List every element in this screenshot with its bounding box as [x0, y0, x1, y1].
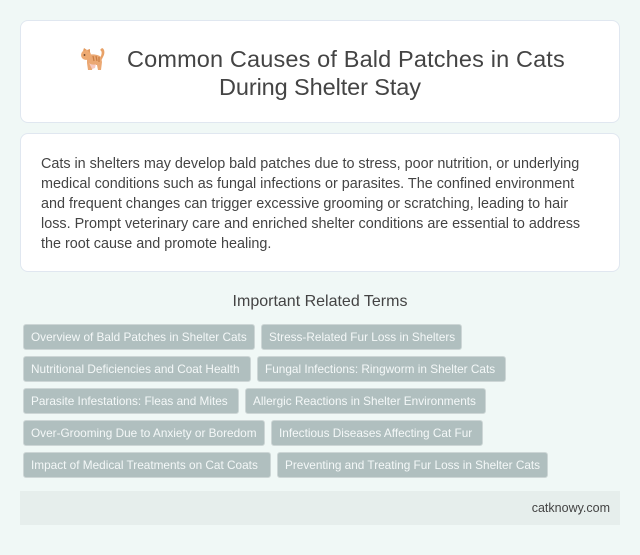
- tag list: Over-Grooming Due to Anxiety or Boredom: [31, 426, 257, 440]
- tag list: Stress-Related Fur Loss in Shelters: [269, 330, 455, 344]
- tag list: Fungal Infections: Ringworm in Shelter Cats: [265, 362, 495, 376]
- description text: medical conditions such as fungal infections or parasites. The confined environment: [41, 176, 574, 192]
- panel: description: [20, 133, 620, 272]
- description text: Cats in shelters may develop bald patches due to stress, poor nutrition, or underlying: [41, 156, 579, 172]
- tag list: Infectious Diseases Affecting Cat Fur: [279, 426, 472, 440]
- panel: title card: [20, 20, 620, 123]
- tag list: Nutritional Deficiencies and Coat Health: [31, 362, 240, 376]
- heading: related terms: Important Related Terms: [233, 293, 407, 310]
- tag list: Overview of Bald Patches in Shelter Cats: [31, 330, 247, 344]
- tag list: Allergic Reactions in Shelter Environments: [253, 394, 476, 408]
- footer: [20, 491, 620, 525]
- title: [127, 46, 565, 100]
- icon: cat: [81, 48, 104, 70]
- description text: loss. Prompt veterinary care and enriched shelter conditions are essential to address: [41, 216, 580, 232]
- description text: and frequent changes can trigger excessive grooming or scratching, leading to hair: [41, 196, 568, 212]
- title: During Shelter Stay: [219, 74, 421, 100]
- title: Common Causes of Bald Patches in Cats: [127, 46, 565, 72]
- tag list: Impact of Medical Treatments on Cat Coats: [31, 458, 258, 472]
- tag list: Preventing and Treating Fur Loss in Shelter Cats: [285, 458, 540, 472]
- footer site name: catknowy.com: [532, 501, 610, 515]
- tag list: Parasite Infestations: Fleas and Mites: [31, 394, 228, 408]
- tag list: [23, 324, 548, 478]
- description text: the root cause and promote healing.: [41, 236, 271, 252]
- description text: [41, 156, 580, 252]
